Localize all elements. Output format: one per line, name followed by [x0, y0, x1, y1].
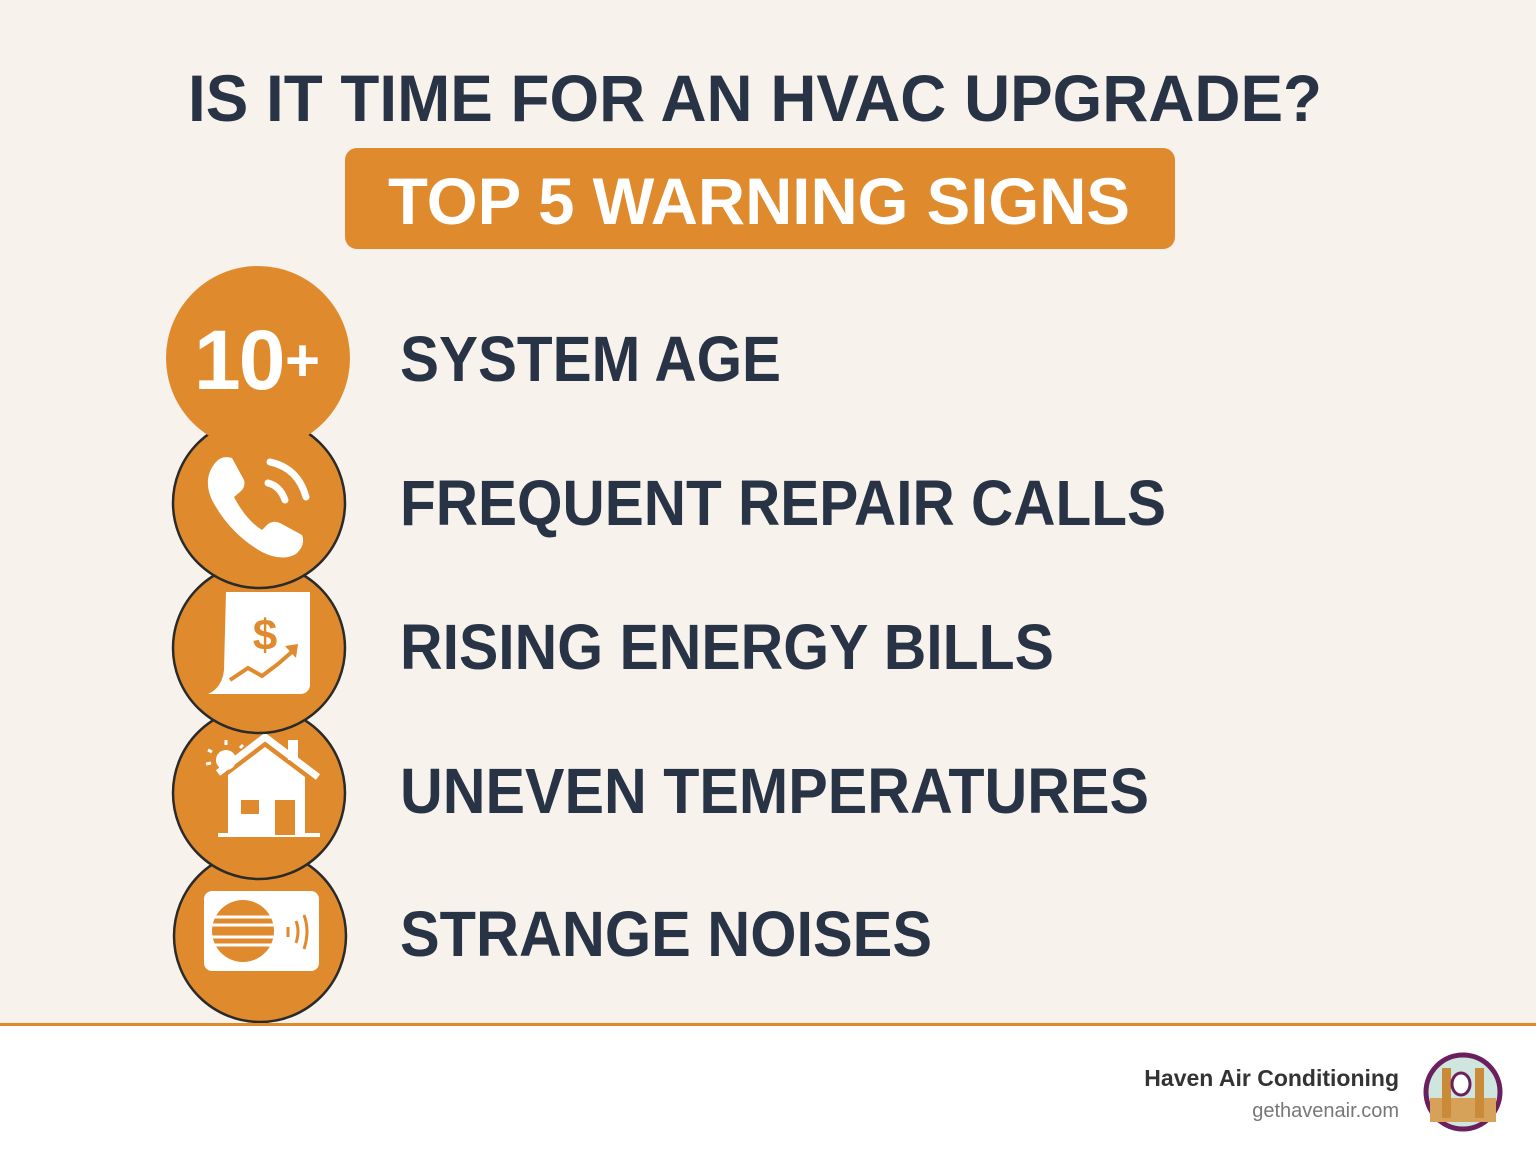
icon: strange noises	[174, 850, 346, 1022]
row label: system age: SYSTEM AGE	[400, 323, 781, 395]
icon: uneven temperatures	[173, 707, 345, 879]
row label: strange noises: STRANGE NOISES	[400, 898, 932, 970]
subtitle banner	[345, 148, 1175, 249]
icon: frequent repair calls	[173, 418, 345, 588]
row label: frequent repair calls: FREQUENT REPAIR CALLS	[400, 467, 1166, 539]
icon: system age 10+: 10	[194, 313, 283, 407]
icon: rising energy bills	[173, 563, 345, 733]
footer: gethavenair.com	[1252, 1100, 1399, 1122]
icon: system age 10+	[166, 266, 350, 450]
icon: system age 10+: +	[285, 327, 320, 394]
row label: rising energy bills: RISING ENERGY BILLS	[400, 611, 1054, 683]
subtitle banner: TOP 5 WARNING SIGNS	[388, 164, 1130, 238]
row label: uneven temperatures: UNEVEN TEMPERATURES	[400, 755, 1149, 827]
footer	[0, 1023, 1536, 1154]
icon: rising energy bills: $	[253, 611, 277, 660]
logo	[1426, 1055, 1500, 1129]
title: IS IT TIME FOR AN HVAC UPGRADE?	[188, 61, 1322, 135]
footer: Haven Air Conditioning	[1144, 1065, 1399, 1091]
